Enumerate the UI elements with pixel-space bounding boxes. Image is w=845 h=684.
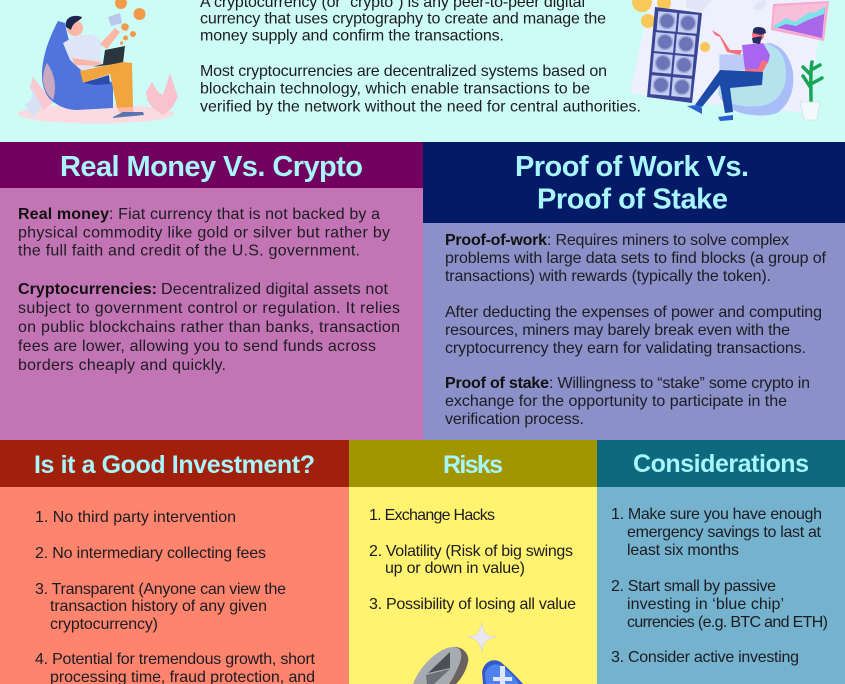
intro text: currency that uses cryptography to create and manage the [200,10,606,28]
text: proof of work: transactions) with rewards (typically the token). [445,268,771,285]
panel: proof of work vs proof of stake [423,142,845,440]
panel: is it a good investment [0,440,349,684]
text: real money definition [18,206,390,260]
panel: considerations [597,440,845,684]
list: investment reasons: transaction history of any given [50,598,267,615]
intro text: blockchain technology, which enable transactions to be [200,80,590,98]
text: proof of work: problems with large data sets to find blocks (a group of [445,250,827,267]
intro text: Most cryptocurrencies are decentralized systems based on [200,63,607,80]
list: considerations: currencies (e.g. BTC and ETH) [627,614,828,631]
list: risks: 3. Possibility of losing all value [369,596,576,613]
text: proof of work [445,232,827,285]
text: proof of stake: : Willingness to “stake” some crypto in [549,375,810,392]
text: real money definition: physical commodity like gold or silver but rather by [18,224,390,242]
heading: proof of work vs proof of stake: Proof of Stake [537,184,728,216]
list: considerations: investing in ‘blue chip’ [627,596,784,613]
list: investment reasons: 2. No intermediary collecting fees [35,545,266,562]
text: cryptocurrencies definition: Decentralized digital assets not [161,281,389,298]
text: proof of stake: exchange for the opportunity to participate in the [445,393,787,410]
list: considerations: 3. Consider active investing [611,649,799,666]
text: real money definition: the full faith and credit of the U.S. government. [18,242,360,260]
list: investment reasons: 3. Transparent (Anyone can view the [35,581,286,598]
text: real money definition: Real money [18,206,109,223]
intro text: money supply and confirm the transactions. [200,28,504,44]
list: considerations: emergency savings to last at [627,524,822,541]
intro text: verified by the network without the need for central authorities. [200,98,641,116]
heading: considerations: Considerations [633,450,809,478]
heading: is it a good investment: Is it a Good Investment? [34,451,315,479]
list: considerations: 2. Start small by passive [611,578,776,595]
chart on wall [771,1,829,41]
list: considerations: least six months [627,542,739,559]
text: cryptocurrencies definition: on public blockchains rather than banks, transaction [18,319,400,336]
list: risks: up or down in value) [385,560,525,577]
text: cryptocurrencies definition [18,281,400,374]
text: mining costs: cryptocurrency they earn for validating transactions. [445,340,806,357]
illustration: man with mining rig and chart [630,0,829,121]
text: mining costs: After deducting the expenses of power and computing [445,304,822,321]
text: cryptocurrencies definition: fees are lower, allowing you to send funds across [18,338,376,355]
text: real money definition: : Fiat currency that is not backed by a [109,206,380,223]
heading: risks: Risks [443,451,503,479]
list: investment reasons: 1. No third party intervention [35,509,236,526]
text: proof of work: Proof-of-work [445,232,547,249]
text: proof of work: : Requires miners to solve complex [547,232,789,249]
text: mining costs [445,304,822,357]
list: investment reasons: 4. Potential for tremendous growth, short [35,651,316,668]
list: risks: 1. Exchange Hacks [369,507,495,524]
list: risks: 2. Volatility (Risk of big swings [369,543,573,560]
panel: risks [349,440,597,684]
list: investment reasons [35,509,316,684]
text: cryptocurrencies definition: borders cheaply and quickly. [18,357,226,374]
heading: proof of work vs proof of stake [515,151,749,216]
heading: real money vs crypto: Real Money Vs. Crypto [60,151,363,183]
list: investment reasons: cryptocurrency) [50,616,158,633]
list: risks [369,507,576,613]
heading: proof of work vs proof of stake: Proof of Work Vs. [515,151,749,183]
intro text [200,0,641,116]
mining rig [647,7,702,103]
text: proof of stake: verification process. [445,411,584,428]
icon: blue coin [482,660,523,684]
list: considerations: 1. Make sure you have enough [611,506,822,523]
icon: silver ethereum coin [413,647,468,684]
text: proof of stake: Proof of stake [445,375,549,392]
list: considerations [611,506,828,666]
text: cryptocurrencies definition: Cryptocurrencies: [18,281,157,298]
text: mining costs: resources, miners may barely break even with the [445,322,790,339]
icon: sparkle [468,622,496,652]
text: cryptocurrencies definition: subject to government control or regulation. It relies [18,300,400,317]
panel: real money vs crypto [0,142,423,440]
text: proof of stake [445,375,810,428]
potted plant [800,62,822,120]
illustration: man in beanbag with laptop and coins [18,0,178,124]
